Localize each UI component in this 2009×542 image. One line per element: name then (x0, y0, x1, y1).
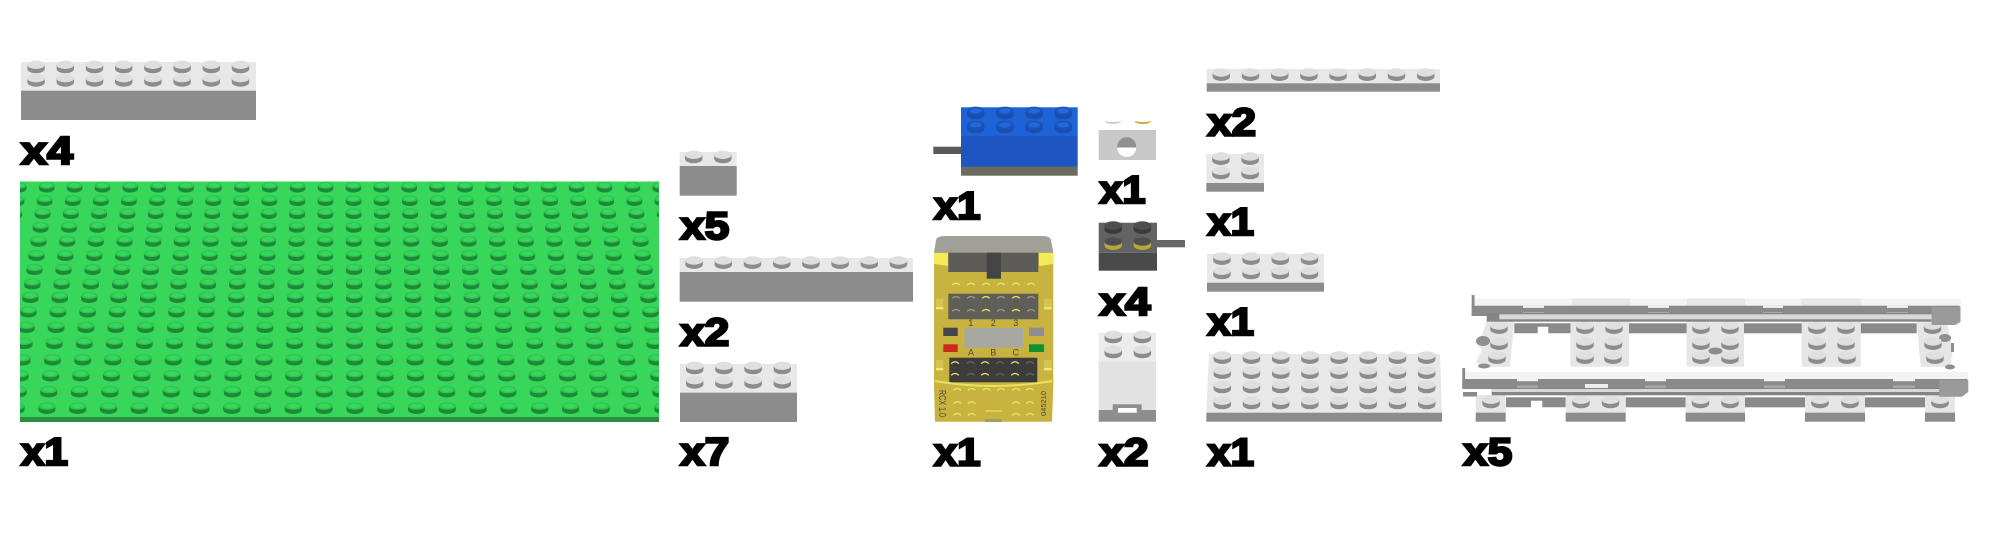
part: dark grey motor brick (1099, 221, 1185, 271)
part: yellow RCX controller: A (968, 348, 974, 358)
quantity label: x1 (21, 431, 68, 474)
quantity label: x5 (680, 205, 729, 248)
quantity label: x4 (1100, 281, 1151, 324)
part: green baseplate (0, 182, 702, 422)
upper sleepers (1475, 322, 1514, 367)
lower sleeper studs (1482, 396, 1500, 408)
quantity label: x2 (1208, 102, 1256, 144)
part: yellow RCX controller: 2 (991, 318, 996, 328)
side text: RCX 1.0 (936, 390, 947, 417)
part: white battery block (1099, 331, 1156, 422)
upper sleeper studs (1490, 321, 1508, 334)
part: white technic brick (1099, 121, 1156, 160)
quantity label: x1 (934, 185, 980, 228)
quantity label: x4 (21, 130, 74, 173)
port labels: 1 (968, 318, 973, 328)
lower cross bars (1506, 397, 1566, 407)
part: 2x2 plate (1206, 152, 1264, 192)
quantity label: x1 (1208, 201, 1254, 244)
quantity label: x2 (680, 312, 729, 354)
part: yellow RCX controller: 045210 (1041, 391, 1048, 416)
body (934, 252, 1053, 422)
part: 2x4 plate (1207, 252, 1324, 292)
part: yellow RCX controller: C (1012, 348, 1019, 358)
part: 4x8 plate (1206, 351, 1442, 422)
part: 1x8 plate (1207, 68, 1440, 92)
part: blue motor (933, 107, 1078, 176)
quantity label: x1 (1208, 432, 1254, 474)
part: 1x2 brick (680, 151, 737, 196)
part: 2x8 brick (21, 61, 256, 120)
part: yellow RCX controller (934, 236, 1053, 422)
connectors (1476, 336, 1490, 346)
quantity label: x5 (1463, 431, 1512, 474)
lower rail (1462, 372, 1968, 380)
buttons (943, 328, 958, 336)
stud highlights (952, 283, 1034, 415)
part: 2x4 brick (680, 362, 797, 422)
side nubs (936, 299, 943, 310)
quantity label: x2 (1100, 432, 1148, 474)
part: yellow RCX controller: 3 (1013, 318, 1018, 328)
part: yellow RCX controller: B (990, 348, 996, 358)
quantity label: x1 (934, 432, 980, 474)
part: 1x8 brick (680, 256, 913, 302)
display (964, 328, 1023, 348)
ports (948, 294, 1038, 319)
quantity label: x1 (1208, 301, 1254, 344)
quantity label: x1 (1100, 169, 1146, 212)
upper cross bars (1514, 323, 1572, 333)
part: train track (1462, 295, 1968, 422)
quantity label: x7 (680, 431, 729, 474)
upper rail (1472, 298, 1961, 306)
lower sleepers (1476, 395, 1506, 413)
